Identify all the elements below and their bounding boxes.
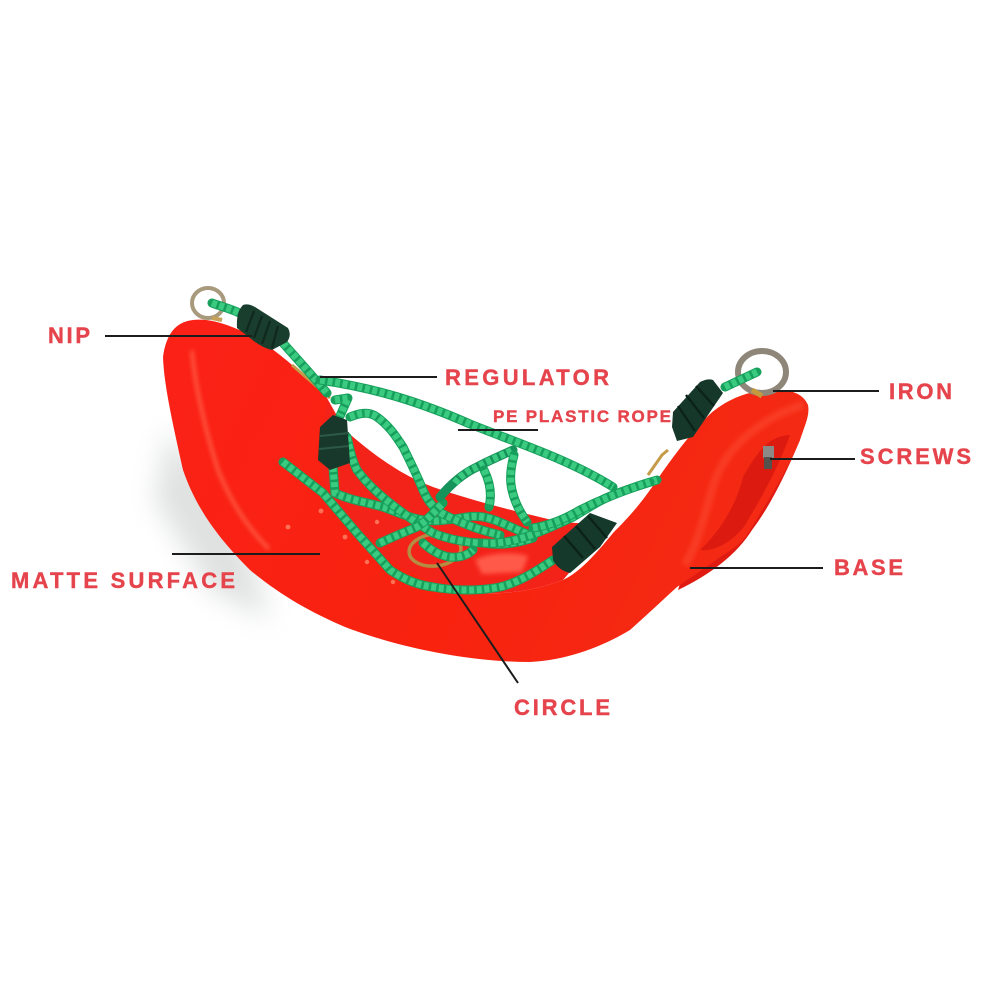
iron ring: right (738, 351, 786, 396)
pale reflections near seat centre (475, 553, 528, 574)
label: PE PLASTIC ROPE: PE PLASTIC ROPE (493, 407, 671, 426)
regulator clamp: top left (237, 304, 290, 350)
label: REGULATOR: REGULATOR (445, 365, 609, 390)
brass links (292, 365, 668, 475)
window in handle (700, 435, 790, 550)
white gap above far rim (348, 400, 625, 516)
label: BASE: BASE (834, 555, 903, 580)
green PE rope (212, 303, 757, 590)
label: IRON: IRON (889, 379, 952, 404)
circle ring (407, 531, 463, 569)
regulator clamp: lower right (552, 513, 617, 573)
light moulded highlight on left side (192, 352, 268, 548)
swing seat body (163, 320, 808, 662)
underside of base (678, 440, 800, 590)
screw in handle (763, 446, 774, 469)
matte surface dots (286, 509, 512, 584)
handle highlight band on right (685, 405, 803, 565)
regulator clamp: right top (672, 379, 723, 441)
label: SCREWS: SCREWS (860, 444, 971, 469)
label: MATTE SURFACE: MATTE SURFACE (11, 568, 235, 593)
soft shadow behind seat (155, 430, 270, 620)
seat inner surface seen behind the ropes (322, 398, 610, 593)
label: CIRCLE: CIRCLE (514, 695, 610, 720)
seat shell (163, 320, 808, 662)
label: NIP: NIP (48, 323, 90, 348)
pointer lines (105, 336, 879, 683)
regulator clamp: left centre (318, 415, 350, 470)
iron ring: left (192, 288, 224, 320)
